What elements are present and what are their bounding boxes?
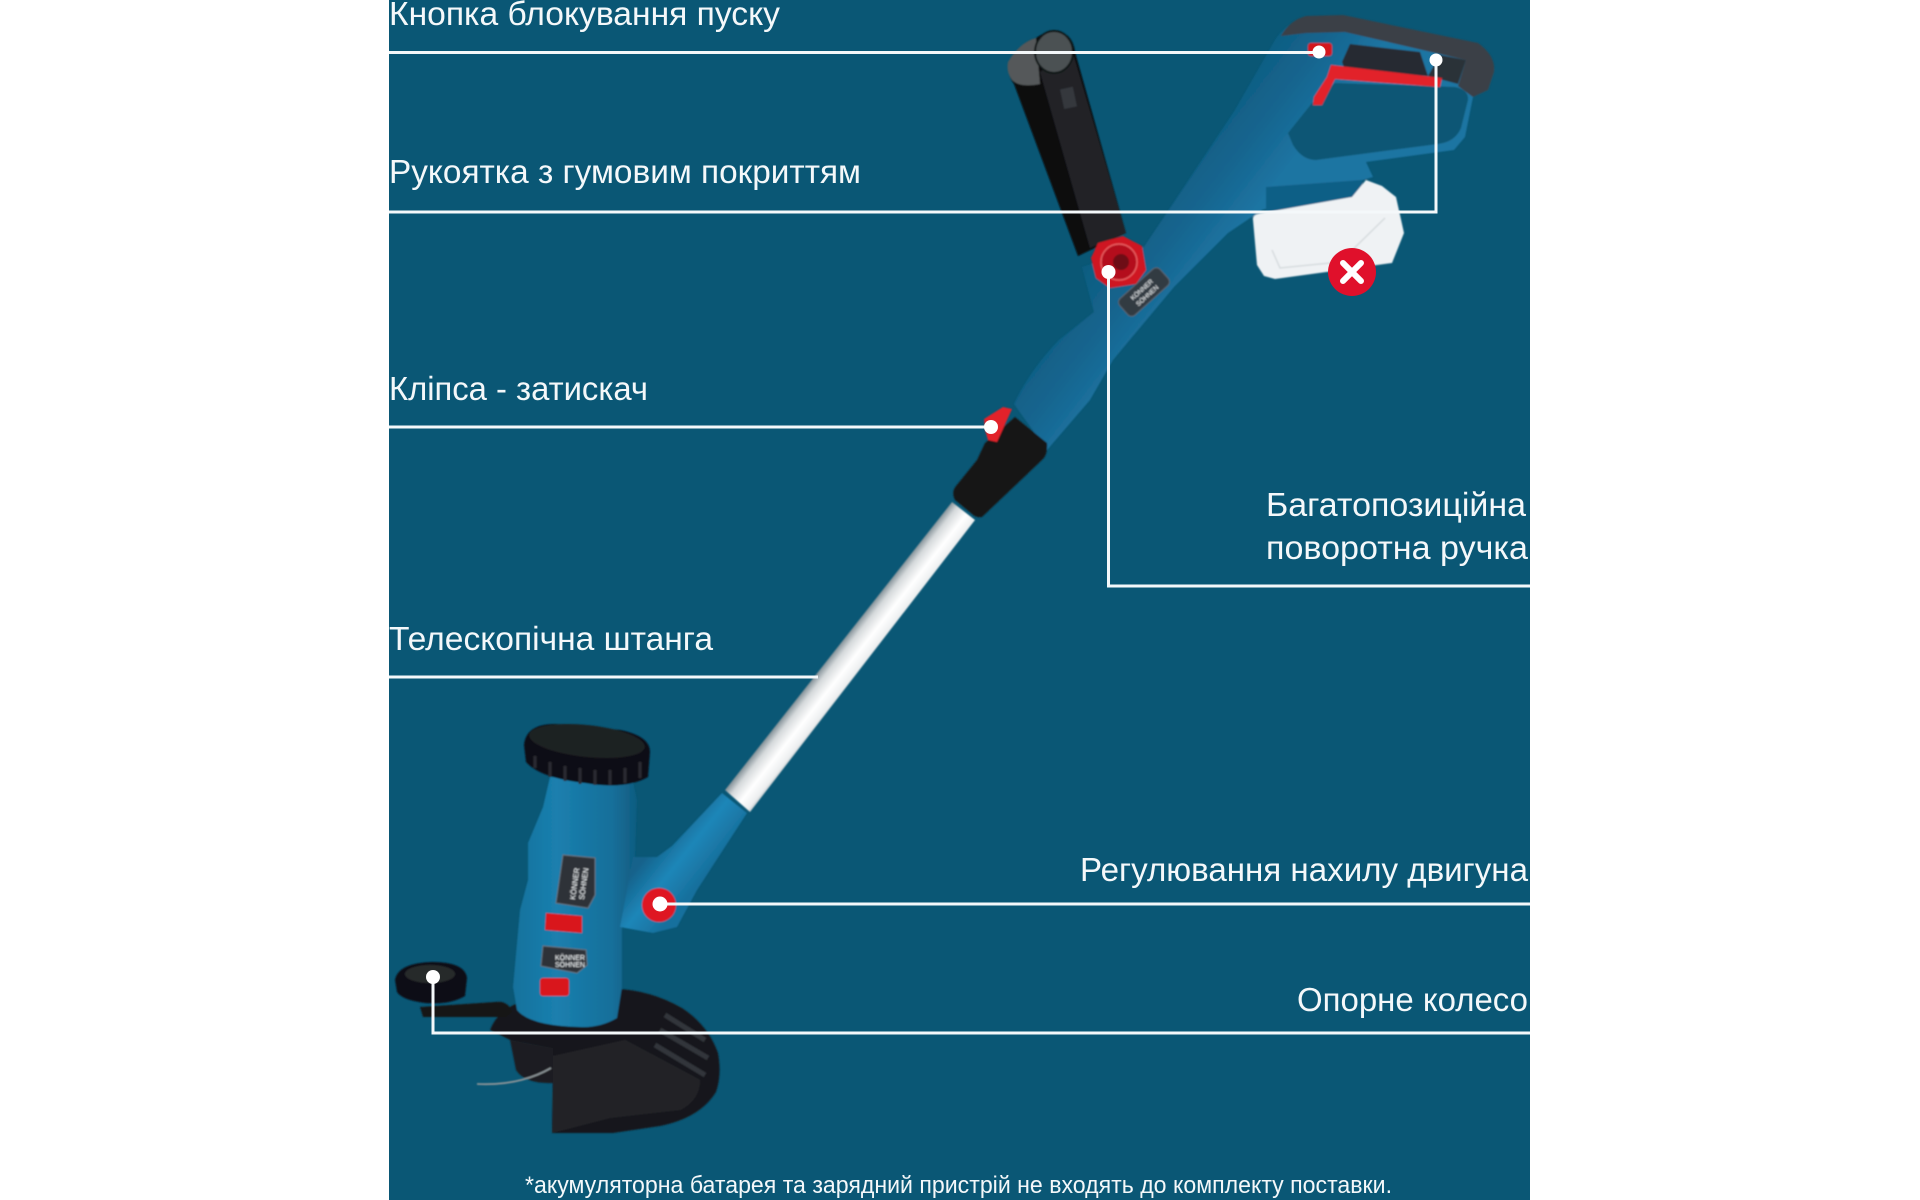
red inset lower [540, 978, 569, 996]
lock-off button [1308, 43, 1332, 56]
icon: battery not included [1328, 248, 1376, 296]
brand plate horizontal [541, 946, 587, 973]
callout: support wheel [426, 970, 1530, 1033]
footnote: *акумуляторна батарея та зарядний пристрій не входять до комплекту поставки. [525, 1172, 1392, 1199]
callout: rubber grip [389, 54, 1442, 212]
brand plate horizontal: KÖNNER [555, 954, 585, 962]
brand plate on shaft [1117, 266, 1171, 318]
callout: multi-position handle: Багатопозиційна [1266, 486, 1527, 523]
cutting line [477, 1068, 551, 1084]
motor tilt knob [642, 888, 676, 922]
support wheel arm [420, 1002, 512, 1017]
trimmer product illustration [395, 15, 1494, 1133]
red clip [984, 407, 1012, 442]
callout: multi-position handle: поворотна ручка [1266, 529, 1529, 566]
red trigger [1313, 65, 1442, 105]
trimmer guard [490, 989, 720, 1133]
handle opening [1288, 83, 1468, 160]
battery pack [1253, 180, 1404, 279]
brand plate vertical: SÖHNEN [577, 867, 590, 900]
callout: clip clamp [389, 370, 998, 434]
red inset upper [545, 913, 582, 933]
motor head body [513, 777, 637, 1027]
support wheel [395, 962, 467, 1003]
callout: clip clamp: Кліпса - затискач [389, 370, 648, 407]
callout: multi-position handle [1102, 265, 1530, 586]
callout: rubber grip: Рукоятка з гумовим покриттям [389, 153, 861, 190]
telescopic pole [725, 502, 975, 812]
brand plate on shaft: SÖHNEN [1134, 283, 1161, 308]
brand plate vertical [556, 855, 595, 908]
black top cap [524, 719, 650, 785]
callout: lock-off button [389, 0, 1326, 58]
black collar [953, 417, 1047, 517]
multi-position handle knob [1091, 236, 1146, 288]
callout: support wheel: Опорне колесо [1297, 981, 1528, 1018]
auxiliary folding handle [1008, 31, 1126, 256]
callout: motor tilt adjustment [652, 851, 1530, 912]
brand plate horizontal: SÖHNEN [555, 961, 585, 969]
connecting arm [620, 793, 747, 933]
rubber grip [1281, 15, 1494, 97]
upper shaft and handle body [1014, 17, 1494, 450]
callout: motor tilt adjustment: Регулювання нахилу двигуна [1080, 851, 1529, 888]
battery mount [1266, 180, 1364, 216]
brand plate vertical: KÖNNER [568, 867, 582, 900]
callout: telescopic pole: Телескопічна штанга [389, 620, 714, 657]
background panel [389, 0, 1530, 1200]
brand plate on shaft: KÖNNER [1129, 277, 1155, 302]
